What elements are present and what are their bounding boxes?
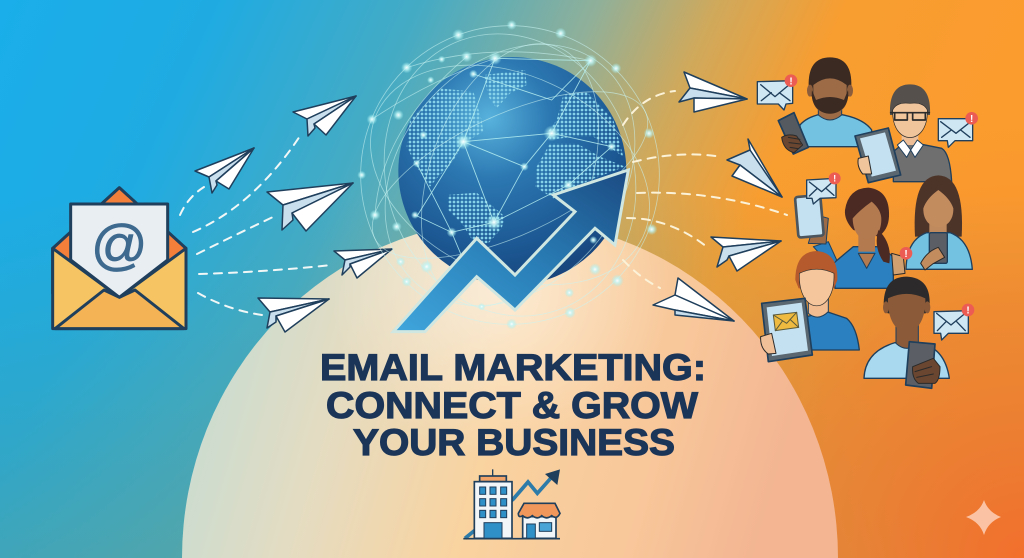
plane 2 (195, 148, 254, 193)
person 3: woman raising phone (795, 188, 912, 288)
plane 3 (267, 183, 353, 231)
globe with network (358, 20, 660, 329)
bubble 6: ! (966, 306, 970, 317)
plane 5 (258, 298, 329, 332)
bubble 2 (938, 112, 978, 147)
ring lines (334, 0, 686, 356)
icon: business buildings with growth arrow (463, 469, 560, 539)
person 2: man with glasses and tablet (855, 84, 952, 183)
title: CONNECT & GROW (326, 385, 698, 426)
title: EMAIL MARKETING: (320, 347, 706, 388)
person 1: bearded man with phone (778, 57, 872, 154)
title: YOUR BUSINESS (353, 422, 675, 463)
hill panel (182, 220, 838, 558)
title (320, 347, 706, 463)
plane r2 (727, 139, 782, 197)
person 5: red haired man with tablet (761, 251, 859, 362)
dotted world map (407, 70, 625, 243)
right paper planes (653, 72, 782, 321)
plane r1 (679, 72, 747, 112)
plane 1 (293, 96, 356, 136)
left paper planes (195, 96, 392, 332)
bubble 3: ! (833, 174, 836, 184)
people group (757, 57, 978, 388)
icon: sparkle watermark (966, 500, 1001, 535)
plane 4 (334, 249, 392, 278)
bubble 3 (807, 172, 841, 204)
growth arrow (393, 170, 628, 332)
plane r3 (711, 237, 781, 271)
network links (415, 58, 612, 260)
right dashed flight paths (623, 91, 787, 288)
plane r4 (653, 278, 734, 321)
bubble 2: ! (970, 114, 973, 125)
person 3: woman raising phone: ! (904, 249, 908, 260)
person 4: woman with long hair and phone (906, 175, 972, 270)
bubble 6 (934, 304, 974, 340)
glowing nodes (357, 20, 657, 329)
bubble 1 (757, 74, 797, 110)
icon: envelope with at sign: @ (91, 213, 148, 276)
left dashed flight paths (180, 133, 332, 315)
icon: envelope with at sign (53, 188, 186, 329)
bubble 1: ! (789, 76, 793, 87)
person 6: man with dark skin and phone (864, 277, 949, 388)
